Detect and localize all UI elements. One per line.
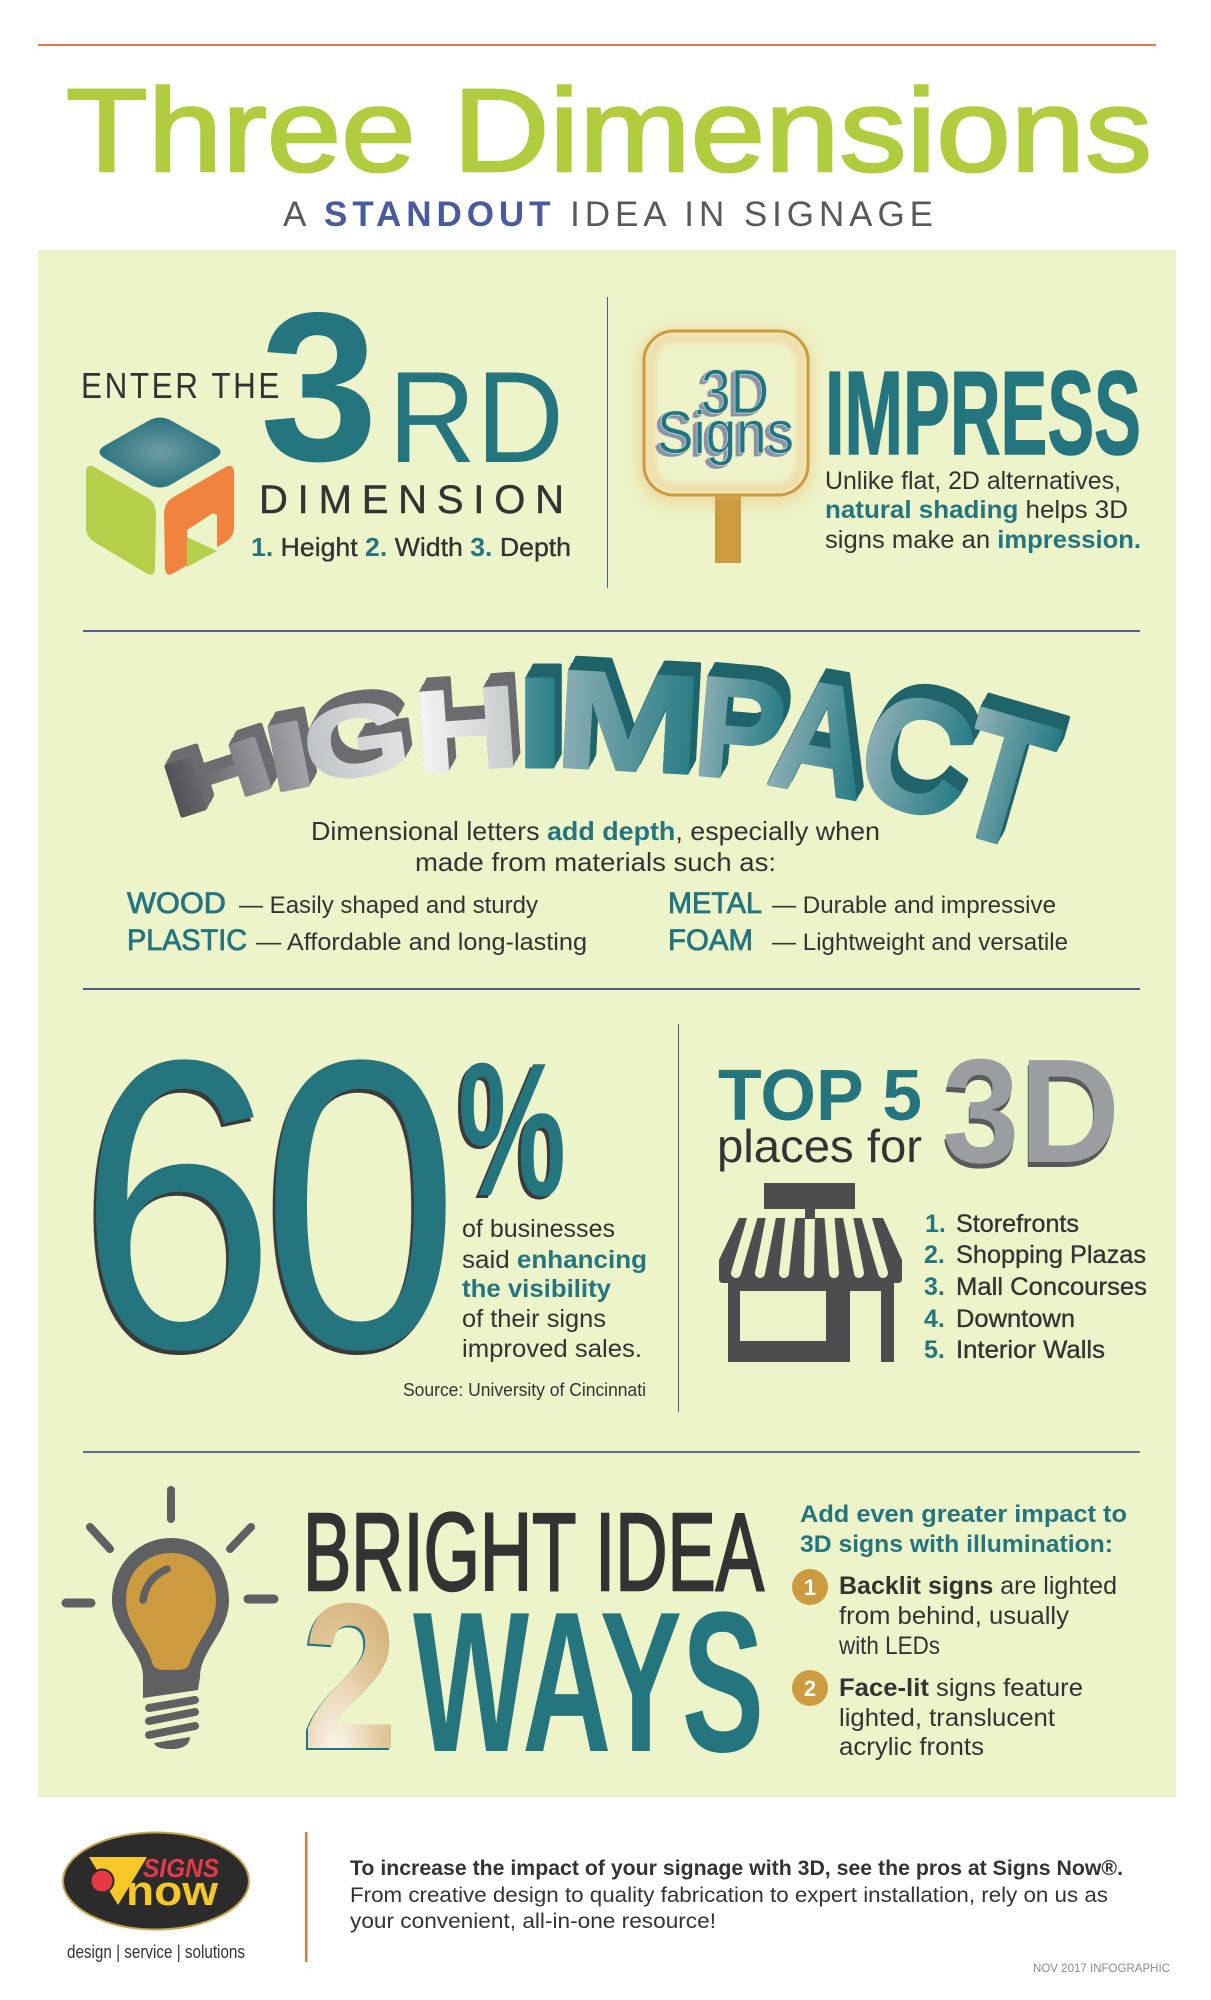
icon: sign xyxy=(640,331,810,563)
item: backlit: with LEDs xyxy=(838,1632,940,1660)
text: 60 percent description: the visibility xyxy=(462,1275,611,1303)
list: top 5 places: Shopping Plazas xyxy=(956,1241,1146,1269)
materials: plastic xyxy=(127,924,587,957)
materials: metal xyxy=(668,887,1056,920)
materials: foam xyxy=(668,924,1068,957)
icon: storefront xyxy=(719,1183,902,1362)
text: illumination intro: 3D signs with illumination: xyxy=(800,1531,1113,1558)
materials: metal: — Durable and impressive xyxy=(772,892,1056,919)
heading: 3D arched high impact: M xyxy=(552,641,705,804)
text: call to action: To increase the impact of your signage with 3D, see the pros at Signs Now®. xyxy=(350,1857,1123,1880)
heading: 3D arched high impact xyxy=(153,641,1074,889)
divider xyxy=(678,1024,679,1412)
heading: 3D arched high impact: T xyxy=(935,669,1074,889)
heading: 3D arched high impact: G xyxy=(296,678,416,804)
list: top 5 places: Downtown xyxy=(956,1305,1075,1333)
logo tagline: design | service | solutions xyxy=(67,1942,245,1962)
heading: top 5: TOP 5 xyxy=(718,1056,922,1136)
list: top 5 places xyxy=(924,1210,1147,1364)
text: call to action xyxy=(350,1857,1123,1933)
subtitle: A STANDOUT IDEA IN SIGNAGE xyxy=(283,195,933,234)
title: Three Dimensions xyxy=(66,65,1152,197)
heading: enter the: ENTER THE xyxy=(81,365,282,406)
panel: footer xyxy=(63,1832,1170,1975)
list: top 5 places: 3. xyxy=(924,1273,945,1301)
heading: 2: 2 xyxy=(302,1561,398,1793)
item: face-lit: 2 xyxy=(804,1676,816,1701)
panel: top 5 places xyxy=(717,1029,1147,1364)
heading: places for: places for xyxy=(717,1120,922,1172)
text: dimensional letters: made from materials such as: xyxy=(415,847,776,877)
text: 60 percent description: of businesses xyxy=(462,1215,615,1243)
icon: light bulb xyxy=(66,1490,274,1749)
panel: main background xyxy=(38,250,1176,1797)
divider xyxy=(83,630,1140,632)
heading: RD: RD xyxy=(388,344,564,490)
logo: signs now xyxy=(63,1832,249,1930)
source: Source: University of Cincinnati xyxy=(403,1380,646,1400)
text: impress body: natural shading helps 3D xyxy=(825,496,1128,524)
text: impress body: Unlike flat, 2D alternatives, xyxy=(825,467,1121,495)
panel: high impact xyxy=(127,641,1074,957)
text: illumination intro: Add even greater impact to xyxy=(800,1501,1127,1528)
text: dimensional letters xyxy=(311,816,880,877)
text: impress body xyxy=(825,467,1141,554)
heading: big 3: 3 xyxy=(260,268,378,505)
list: top 5 places: Storefronts xyxy=(956,1210,1079,1238)
divider xyxy=(83,988,1140,990)
icon: sign: 3D xyxy=(701,358,769,427)
heading: 3D: 3D xyxy=(942,1029,1120,1194)
text: call to action: your convenient, all-in-one resource! xyxy=(350,1910,716,1933)
text: 60 percent description: said enhancing xyxy=(462,1246,647,1274)
icon: sign: Signs xyxy=(657,399,794,466)
panel: 3D signs impress xyxy=(640,331,1141,563)
panel: enter the 3rd dimension xyxy=(81,268,571,575)
list: top 5 places: Mall Concourses xyxy=(956,1273,1147,1301)
materials: metal: METAL xyxy=(668,887,762,920)
item: backlit: Backlit signs are lighted xyxy=(839,1572,1117,1600)
heading: ways: WAYS xyxy=(413,1571,764,1794)
heading: dimension: DIMENSION xyxy=(259,478,564,522)
heading: 3D arched high impact: I xyxy=(255,700,323,812)
heading: bright idea: BRIGHT IDEA xyxy=(303,1491,764,1614)
heading: 3D arched high impact: C xyxy=(841,656,993,857)
heading: 3D arched high impact: H xyxy=(153,720,283,835)
materials: foam: — Lightweight and versatile xyxy=(772,929,1068,956)
list: top 5 places: 5. xyxy=(924,1336,945,1364)
item: backlit: from behind, usually xyxy=(839,1602,1070,1630)
text: dimensional letters: Dimensional letters add depth, especially when xyxy=(311,816,880,846)
item: face-lit xyxy=(792,1670,1083,1761)
item: backlit xyxy=(792,1569,1117,1660)
item: backlit: 1 xyxy=(804,1575,816,1600)
stat: 60: 60 xyxy=(78,974,460,1435)
item: face-lit: lighted, translucent xyxy=(839,1704,1055,1732)
text: illumination intro xyxy=(800,1501,1127,1558)
text: 60 percent description: of their signs xyxy=(462,1305,606,1333)
item: face-lit: acrylic fronts xyxy=(839,1733,984,1761)
heading: 3D arched high impact: P xyxy=(689,647,792,813)
date note: NOV 2017 INFOGRAPHIC xyxy=(1033,1961,1170,1975)
heading: 3D arched high impact: A xyxy=(759,644,884,833)
icon: cube xyxy=(86,418,234,575)
list: top 5 places: 1. xyxy=(925,1210,946,1238)
list: top 5 places: Interior Walls xyxy=(956,1336,1105,1364)
materials: wood: WOOD xyxy=(127,887,226,920)
logo: signs now: SIGNS xyxy=(143,1853,220,1883)
top rule xyxy=(38,44,1156,46)
list: top 5 places: 2. xyxy=(924,1241,945,1269)
text: 60 percent description xyxy=(462,1215,647,1363)
heading: 3D arched high impact: H xyxy=(410,662,523,797)
materials: plastic: — Affordable and long-lasting xyxy=(256,929,587,956)
materials: plastic: PLASTIC xyxy=(127,924,247,957)
text: impress body: signs make an impression. xyxy=(825,526,1141,554)
stat: percent sign: % xyxy=(458,1024,566,1236)
logo: signs now: now xyxy=(126,1867,218,1914)
item: face-lit: Face-lit signs feature xyxy=(839,1674,1083,1702)
materials: wood xyxy=(127,887,538,920)
text: 60 percent description: improved sales. xyxy=(462,1335,642,1363)
materials: foam: FOAM xyxy=(668,924,753,957)
divider xyxy=(83,1451,1140,1453)
panel: bright idea xyxy=(66,1490,1127,1794)
panel: 60 percent xyxy=(78,974,647,1435)
divider: orange rule xyxy=(305,1832,308,1962)
heading: 3D arched high impact: I xyxy=(516,651,564,795)
divider xyxy=(607,297,608,588)
text: call to action: From creative design to quality fabrication to expert installation, rely on us as xyxy=(350,1884,1108,1907)
dimensions list: 1. Height 2. Width 3. Depth xyxy=(251,532,571,562)
materials: wood: — Easily shaped and sturdy xyxy=(239,892,538,919)
list: top 5 places: 4. xyxy=(924,1305,945,1333)
